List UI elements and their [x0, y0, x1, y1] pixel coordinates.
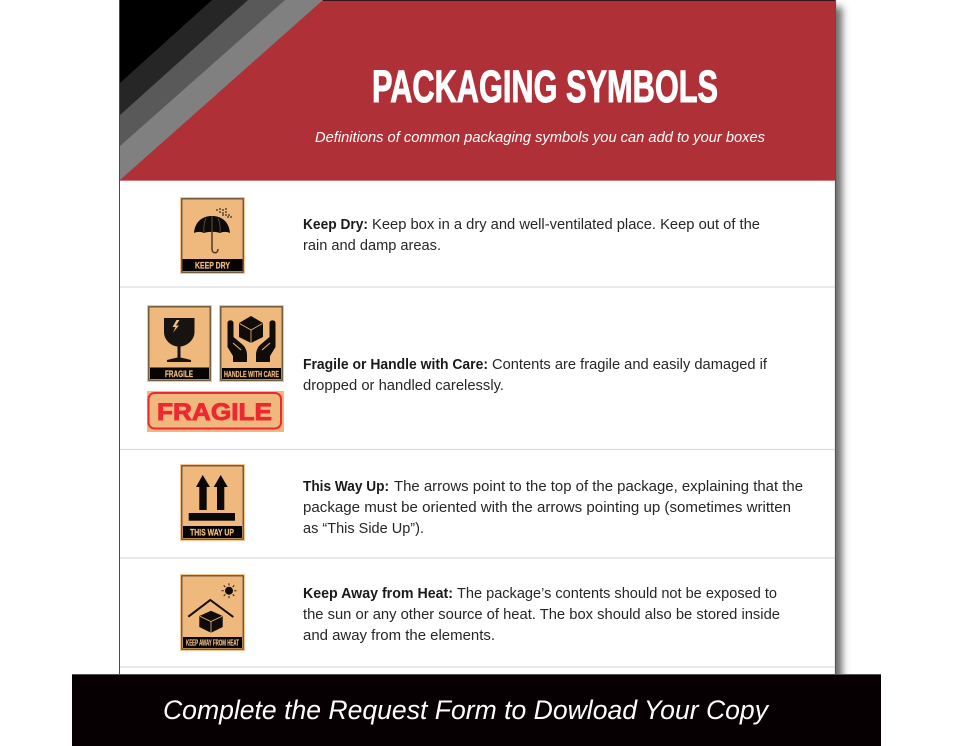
text: this way up: This Way Up: [303, 479, 389, 495]
subtitle: Definitions of common packaging symbols you can add to your boxes [315, 129, 765, 146]
text: fragile or handle with care [303, 357, 768, 394]
icon: keep away from heat [180, 574, 245, 651]
call to action bar [72, 674, 881, 746]
text: fragile or handle with care: Fragile or Handle with Care: [303, 357, 488, 373]
icon: fragile red label [147, 391, 284, 432]
icon: keep away from heat: KEEP AWAY FROM HEAT [186, 638, 239, 648]
icon: fragile glass: FRAGILE [165, 369, 193, 379]
text: this way up: as “This Side Up”). [303, 521, 424, 537]
text: keep dry: Keep box in a dry and well-ventilated place. Keep out of the [372, 217, 760, 233]
page shadow [830, 7, 842, 687]
call to action bar: Complete the Request Form to Dowload Your Copy [163, 695, 769, 725]
text: keep away from heat: Keep Away from Heat: [303, 586, 453, 602]
text: keep away from heat: The package’s contents should not be exposed to [457, 586, 777, 602]
text: keep dry: Keep Dry: [303, 217, 368, 233]
icon: handle with care [219, 305, 284, 382]
icon: fragile red label: FRAGILE [157, 399, 272, 426]
text: this way up: The arrows point to the top of the package, explaining that the [394, 479, 803, 495]
header banner [120, 0, 835, 181]
text: keep away from heat: and away from the elements. [303, 628, 495, 644]
title: PACKAGING SYMBOLS [372, 61, 718, 112]
text: keep away from heat [303, 586, 780, 644]
text: keep away from heat: the sun or any other source of heat. The box should also be stored inside [303, 607, 780, 623]
icon: fragile glass [147, 305, 212, 382]
text: fragile or handle with care: dropped or handled carelessly. [303, 378, 504, 394]
text: this way up: package must be oriented with the arrows pointing up (sometimes written [303, 500, 791, 516]
icon: this way up: THIS WAY UP [190, 528, 234, 538]
icon: this way up [180, 464, 245, 541]
text: keep dry: rain and damp areas. [303, 238, 441, 254]
icon: keep dry [180, 197, 245, 274]
text: fragile or handle with care: Contents are fragile and easily damaged if [492, 357, 768, 373]
text: this way up [303, 479, 803, 537]
row dividers [120, 287, 835, 667]
icon: keep dry: KEEP DRY [195, 260, 230, 270]
text: keep dry [303, 217, 760, 254]
icon: handle with care: HANDLE WITH CARE [224, 369, 279, 379]
document page [120, 0, 836, 674]
